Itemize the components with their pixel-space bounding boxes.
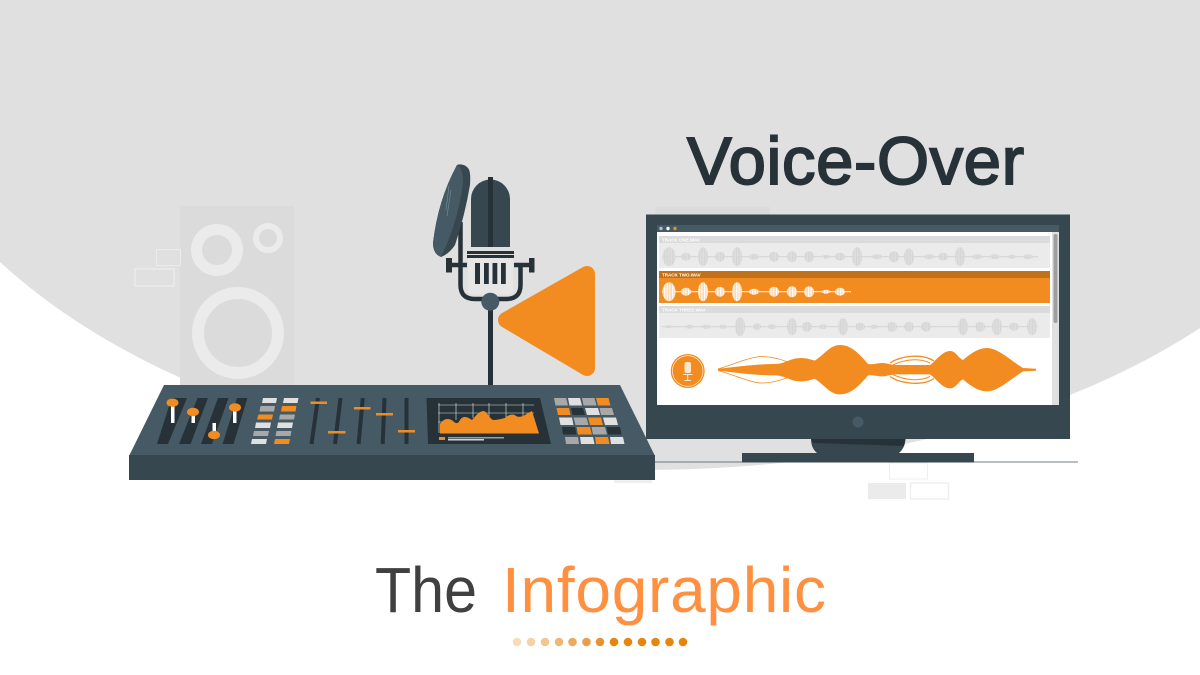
microphone [433,164,534,386]
mic lower body [468,256,513,294]
mic holder [452,222,529,299]
window title bar [657,225,1059,232]
floor line [655,461,1078,463]
background: grey curved shape [0,0,1200,470]
orange play triangle [506,274,587,368]
vertical faders [310,398,415,444]
decorative panels around monitor [614,207,948,499]
track two (active): TRACK TWO.WAV [662,272,701,278]
subtitle: The Infographic: The [375,554,477,626]
speaker illustration [135,206,294,386]
track one: TRACK ONE.WAV [662,238,700,242]
mic stand pole [488,300,493,386]
track one [659,236,1050,268]
title: Voice-Over: Voice-Over [687,124,1024,199]
icon: mic in orange circle [671,354,705,388]
track three: TRACK THREE.WAV [662,308,705,312]
track three [659,306,1050,338]
mic capsule [471,180,510,247]
console front [129,455,655,480]
screen [657,232,1059,405]
large orange waveform [718,345,1036,394]
monitor frame [646,214,1070,439]
button columns [251,398,298,444]
subtitle: The Infographic: Infographic [502,554,826,626]
scrollbar [1052,232,1059,405]
pad grid [554,398,624,444]
pop filter [433,164,470,257]
mixing console [129,385,655,480]
display screen with area chart [426,398,551,444]
mic grille slots [475,263,506,284]
monitor [646,214,1078,462]
track two (active) [659,271,1050,303]
console top [129,385,655,456]
dotted divider [513,638,687,646]
knob sliders [157,398,247,444]
monitor stand [742,439,974,462]
